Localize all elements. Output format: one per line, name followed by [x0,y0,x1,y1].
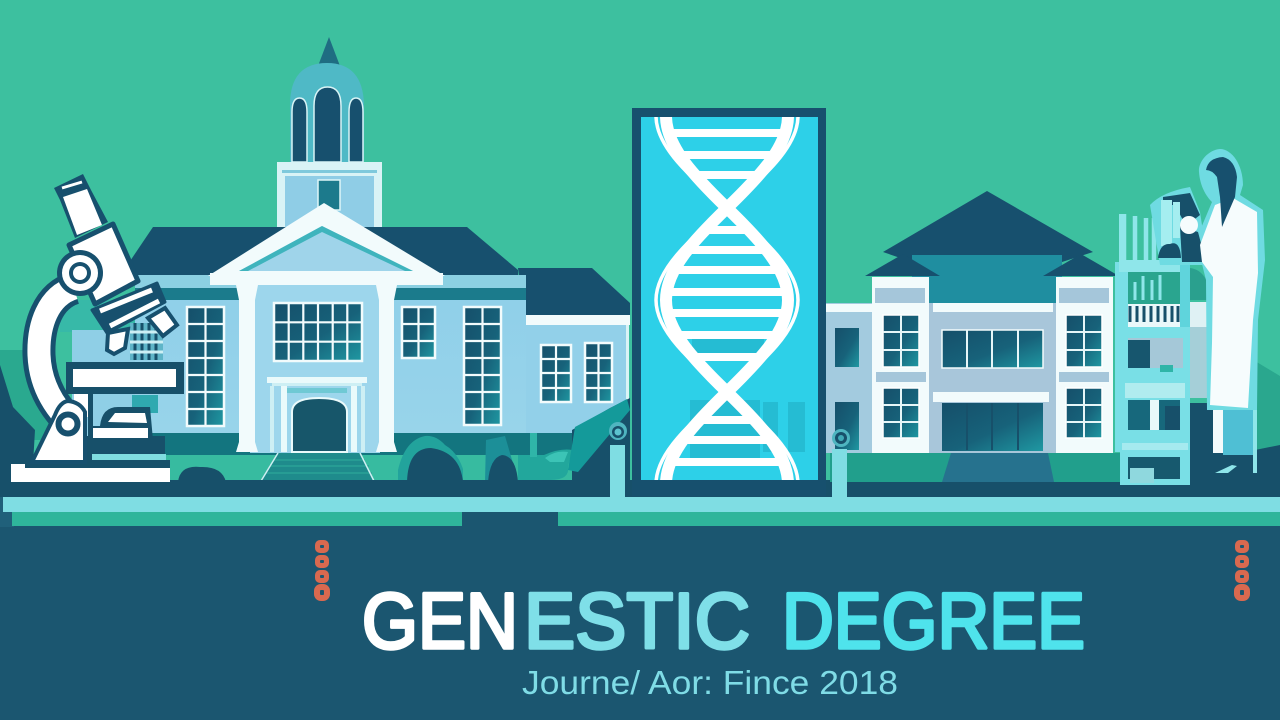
right small roof [1043,254,1119,276]
title [362,576,1085,665]
microscope base [11,436,170,482]
window small [402,307,435,358]
rear glass wall behind microscope [60,300,142,445]
DNA panel [632,108,826,496]
right post lamp [832,429,850,499]
wing window two [585,343,612,402]
ground band [0,480,1280,720]
tower dome and spire [290,37,364,162]
scientist legs [1213,405,1257,473]
rear lab annex [1190,302,1280,482]
scientist hair [1206,157,1237,227]
main wall [135,285,526,433]
flask cluster halo [1150,187,1208,265]
DNA helix strands [656,116,798,484]
tower base [277,162,382,228]
panel screen [641,117,818,480]
background hills [0,268,1280,482]
right tower [1056,277,1113,453]
microscope stage [66,362,184,394]
pediment [208,203,445,285]
microscope arm [39,288,74,416]
nosepiece [92,283,165,333]
right orange indicator dots [1234,540,1250,601]
scientist lab coat [1200,198,1258,408]
scientist hand [1180,216,1198,234]
microscope foot [32,401,85,462]
entrance portal [267,377,367,452]
wing wall [524,315,629,433]
main roof [122,227,518,285]
right campus building [826,191,1120,482]
scientist outline halo [1196,149,1265,410]
window right tall [464,307,501,425]
scientist [1150,149,1265,473]
shelf body [1115,262,1190,452]
lab shelf with glassware [1115,212,1190,485]
upper roof [883,191,1093,262]
test tube rack [1125,304,1183,327]
microscope body [69,224,138,304]
lower bay windows [1122,383,1188,450]
patterned specimen tube [130,323,163,413]
lawn and path [830,453,1120,482]
centre block [929,303,1057,453]
eyepiece tube [54,174,108,238]
garden and stairs [140,398,630,482]
columns [236,285,397,452]
window left tall [187,307,224,426]
left post lamp [609,422,627,498]
dark teal base band [135,433,630,455]
green upper bay [1128,272,1180,304]
title: GEN [362,576,518,665]
left small roof [865,254,940,276]
subtitle: Journe/ Aor: Fince 2018 [522,664,898,701]
objectives [107,308,177,354]
flask and dark blob [1158,193,1206,262]
bottom bay [1120,450,1190,485]
microscope [11,174,184,482]
focus knob [57,250,103,296]
left tower [872,277,929,453]
middle bay [1128,338,1183,372]
top shelf tubes [1119,212,1190,327]
DNA rungs [668,133,786,462]
main university building [60,37,630,482]
cornice [135,275,526,300]
wing roof [518,268,630,316]
title: DEGREE [782,576,1085,665]
window centre [274,303,362,361]
wing window one [541,345,571,402]
centre bay [250,285,380,453]
plant sprigs [1135,275,1160,300]
left wing [826,303,874,453]
lower knob [58,414,78,434]
faded panel reflection [690,338,805,460]
title: ESTIC [524,576,750,665]
upper wall [912,255,1062,305]
panel frame [632,108,826,496]
left orange indicator dots [314,540,330,601]
lower stage [90,407,153,440]
microscope post [74,392,93,439]
